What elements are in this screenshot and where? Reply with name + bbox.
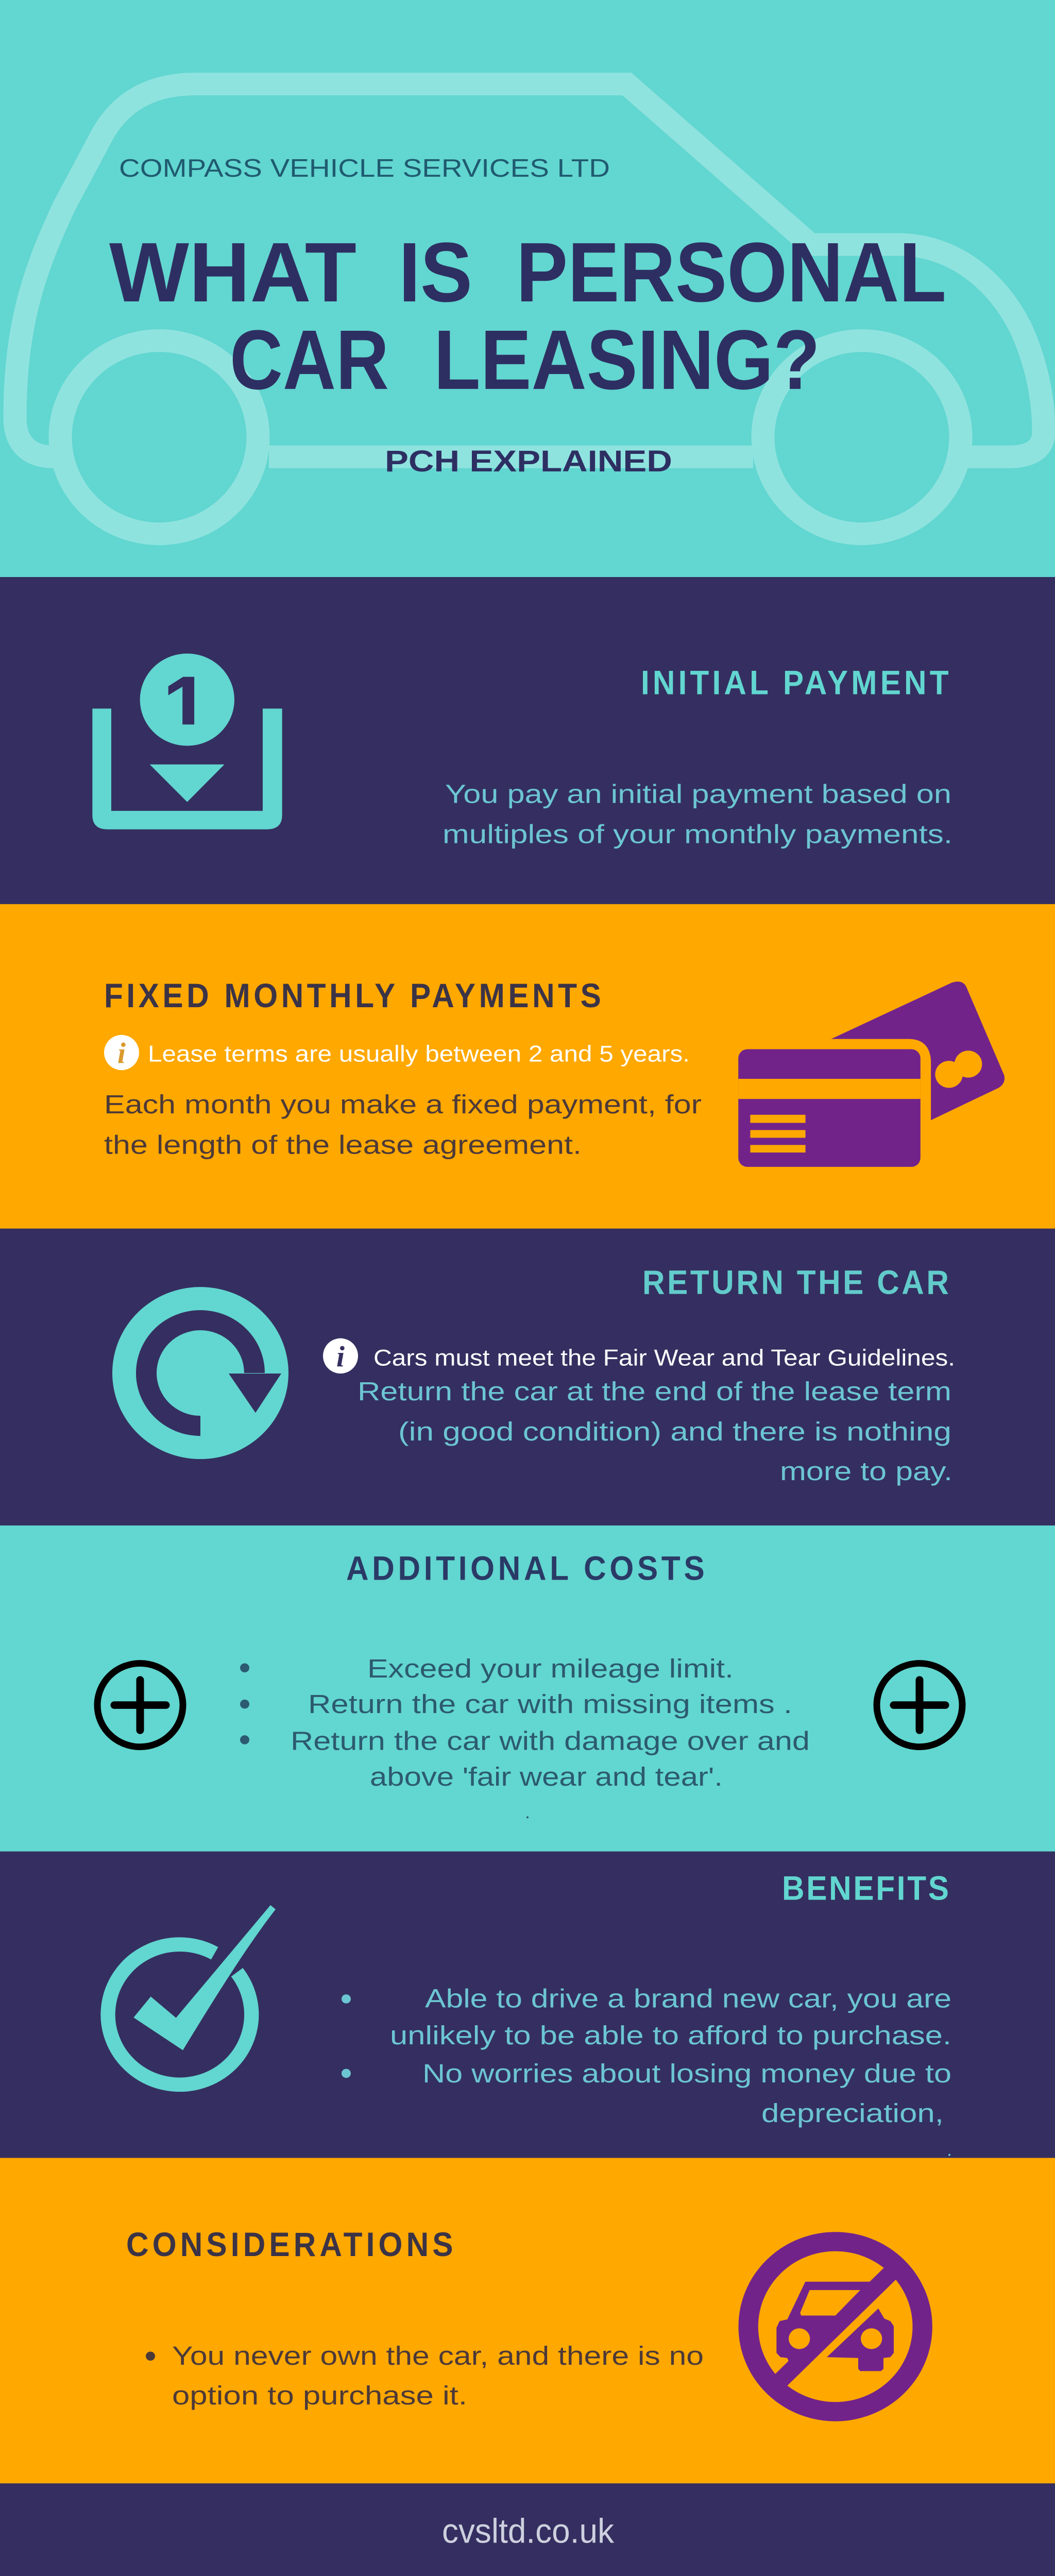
text: fixed payment description: the length of the lease agreement. (104, 1130, 582, 1159)
icon: plus right (877, 1664, 962, 1747)
icon: payment tray with number one (92, 654, 282, 829)
text: initial payment description: You pay an initial payment based on (445, 779, 951, 808)
title: LEASING? (434, 313, 820, 407)
list: additional costs: Exceed your mileage limit. (367, 1653, 734, 1683)
panel: additional costs (0, 1526, 1055, 1852)
panel: return the car (0, 1229, 1055, 1526)
list: considerations: option to purchase it. (172, 2381, 467, 2410)
note: lease terms: i (117, 1038, 126, 1070)
list: benefits: unlikely to be able to afford to purchase. (390, 2020, 951, 2050)
list: additional costs: Return the car with damage over and (291, 1726, 810, 1755)
panel: hero header (0, 0, 1055, 577)
note: fair wear and tear (323, 1338, 955, 1374)
company name: COMPASS VEHICLE SERVICES LTD (119, 154, 610, 182)
list: benefits: No worries about losing money due to (422, 2059, 951, 2088)
text: initial payment description: multiples of your monthly payments. (443, 819, 952, 849)
icon: check mark in circle (108, 1905, 276, 2084)
heading: return the car: RETURN THE CAR (642, 1264, 949, 1301)
panel: benefits (0, 1852, 1055, 2158)
panel: fixed monthly payments (0, 904, 1055, 1229)
text: return description: more to pay. (780, 1456, 952, 1486)
list: additional costs (240, 1653, 810, 1818)
panel: initial payment (0, 577, 1055, 849)
heading: benefits: BENEFITS (782, 1870, 949, 1907)
icon: payment tray with number one: 1 (162, 659, 210, 752)
icon: credit cards (738, 981, 1005, 1167)
list: benefits: depreciation, (761, 2098, 944, 2128)
icon: plus left (97, 1664, 183, 1747)
icon: circular return arrow (112, 1287, 288, 1459)
website address: cvsltd.co.uk (442, 2512, 614, 2550)
list: benefits: Able to drive a brand new car, you are (425, 1984, 951, 2013)
list: benefits (342, 1984, 951, 2156)
heading: additional costs: ADDITIONAL COSTS (346, 1550, 705, 1587)
title: WHAT (109, 226, 356, 320)
note: lease terms (104, 1035, 690, 1070)
text: return description: (in good condition) and there is nothing (398, 1416, 951, 1446)
note: lease terms: Lease terms are usually between 2 and 5 years. (148, 1041, 690, 1066)
title: IS (399, 226, 472, 320)
note: fair wear and tear: Cars must meet the Fair Wear and Tear Guidelines. (373, 1345, 955, 1370)
text: initial payment description (443, 779, 952, 849)
note: fair wear and tear: i (336, 1341, 345, 1373)
heading: initial payment: INITIAL PAYMENT (641, 664, 949, 702)
title: CAR (230, 313, 389, 407)
title (109, 226, 946, 407)
list: additional costs: above 'fair wear and tear'. (370, 1761, 723, 1791)
title: PERSONAL (516, 226, 946, 320)
text: return description: Return the car at the end of the lease term (358, 1376, 951, 1406)
panel: considerations (0, 2158, 1055, 2483)
subtitle: PCH EXPLAINED (385, 444, 672, 478)
list: considerations (146, 2341, 704, 2410)
icon: no car sign (748, 2242, 923, 2412)
text: return description (358, 1376, 952, 1486)
panel: footer (0, 2483, 1055, 2576)
text: fixed payment description: Each month you make a fixed payment, for (104, 1090, 702, 1119)
text: fixed payment description (104, 1090, 702, 1159)
icon: car outline background (15, 84, 1044, 534)
list: additional costs: Return the car with missing items . (308, 1689, 792, 1719)
heading: considerations: CONSIDERATIONS (126, 2226, 453, 2263)
list: considerations: You never own the car, and there is no (172, 2341, 704, 2370)
heading: fixed monthly payments: FIXED MONTHLY PAYMENTS (104, 977, 601, 1015)
